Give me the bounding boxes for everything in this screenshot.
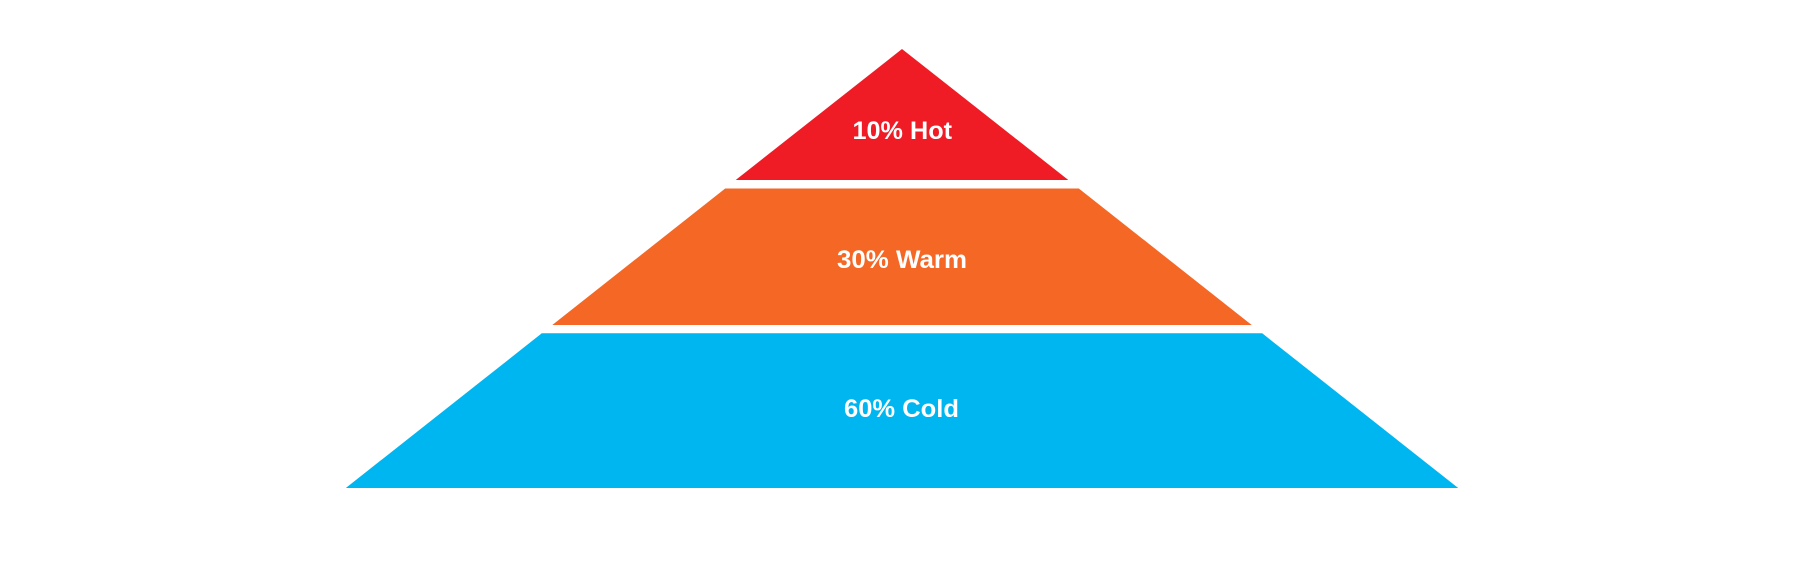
tier: 30% Warm (552, 188, 1252, 325)
tier: 30% Warm: 30% Warm (837, 246, 967, 274)
tier: 10% Hot (736, 49, 1068, 180)
tier: 10% Hot: 10% Hot (852, 117, 953, 145)
tier: 60% Cold: 60% Cold (844, 395, 959, 423)
tier: 60% Cold (346, 333, 1458, 488)
